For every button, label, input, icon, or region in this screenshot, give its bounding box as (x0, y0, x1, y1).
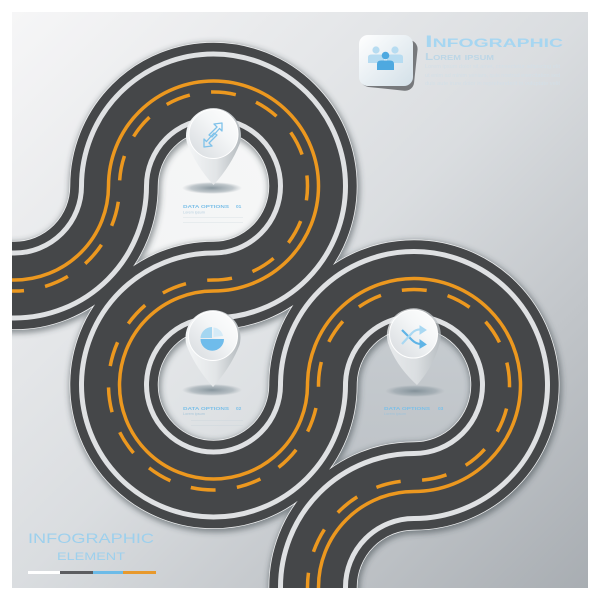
header icon card (359, 35, 418, 92)
data options 01 text: 01 (236, 204, 242, 210)
data options 03 text (384, 406, 444, 416)
header text (425, 32, 564, 87)
road shadow (0, 88, 516, 600)
header text: Lorem ipsum dolor sit amet, consectetur adipiscing elit (425, 64, 561, 70)
bottom title: ELEMENT (57, 551, 125, 563)
pin 1 (182, 108, 242, 194)
bottom title: INFOGRAPHIC (28, 530, 154, 546)
data options 01 text: DATA OPTIONS (183, 204, 230, 210)
data options 03 text: Lorem ipsum (384, 412, 406, 416)
road rim (0, 86, 515, 600)
data options 02 text: 02 (236, 406, 242, 412)
winding road (0, 81, 521, 600)
data options 02 text: DATA OPTIONS (183, 406, 230, 412)
data options 01 text (183, 204, 243, 223)
icon: pie chart (200, 327, 224, 351)
road surface (0, 86, 515, 600)
white edge lines (0, 86, 515, 600)
pin 2 (182, 310, 242, 396)
icon: shuffle arrows (402, 326, 426, 348)
pin 3 (385, 308, 445, 397)
solid orange line (0, 81, 521, 600)
header text: Infographic (425, 32, 564, 51)
data options 03 text: DATA OPTIONS (384, 406, 431, 412)
loop interior fills (138, 139, 396, 458)
colour legend bar (28, 571, 156, 574)
data options 02 text (183, 406, 243, 426)
bottom title (28, 530, 154, 563)
header text: Lorem ipsum (425, 52, 494, 63)
data options 03 text: 03 (438, 406, 444, 412)
dashed orange line (0, 92, 510, 600)
data options 02 text: Lorem ipsum (183, 412, 205, 416)
data options 01 text: Lorem ipsum (183, 210, 205, 214)
icon: diagonal arrows (204, 123, 222, 147)
asphalt (0, 86, 515, 600)
icon: people (368, 46, 403, 70)
header text: duis aute irure dolor in reprehenderit in voluptate velit (425, 81, 561, 87)
header text: ut enim ad minim veniam, quis nostrud exercitation sed (425, 73, 560, 79)
